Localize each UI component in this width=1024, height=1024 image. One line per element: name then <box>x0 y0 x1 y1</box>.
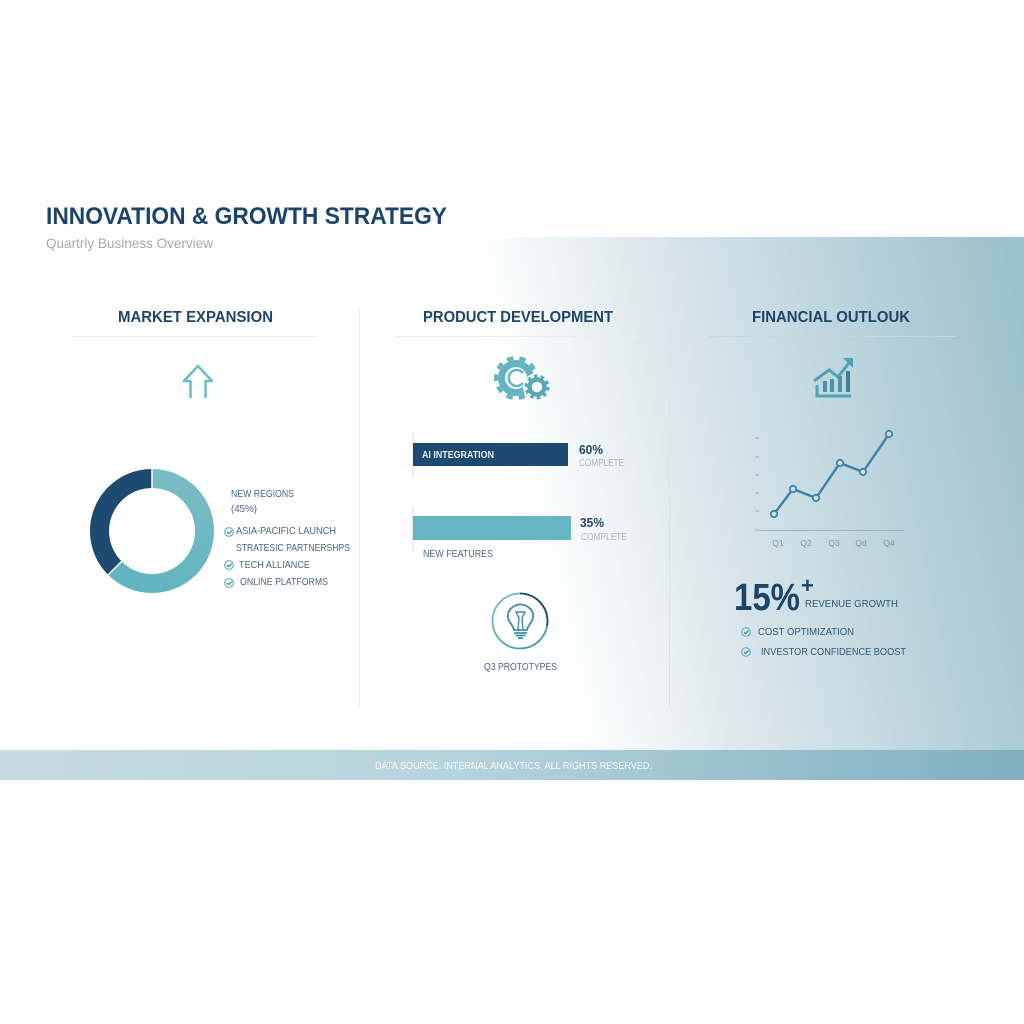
gradient content band <box>0 237 1024 750</box>
value: 60% complete: COMPLETE <box>579 457 624 469</box>
icon: up arrow <box>184 366 212 398</box>
line chart: Qd <box>855 538 867 548</box>
value: 60% complete <box>579 443 624 469</box>
donut legend: ONLINE PLATFORMS <box>240 576 328 588</box>
value: 35% complete <box>580 516 627 543</box>
bar: new features: NEW FEATURES <box>423 548 493 560</box>
donut legend: TECH ALLIANCE <box>239 559 310 571</box>
heading: product development: PRODUCT DEVELOPMENT <box>423 309 613 326</box>
panel: product development <box>394 309 640 673</box>
title: INNOVATION & GROWTH STRATEGY <box>46 203 447 230</box>
line chart: Q1 <box>772 538 784 548</box>
label: Q3 prototypes: Q3 PROTOTYPES <box>484 661 557 673</box>
footer text: DATA SOURCE. INTERNAL ANALYTICS. ALL RIGHTS RESERVED. <box>375 760 652 772</box>
heading: market expansion: MARKET EXPANSION <box>118 309 273 326</box>
line chart: Q2 <box>800 538 812 548</box>
value: 60% complete: 60% <box>579 443 603 457</box>
donut chart <box>100 468 204 584</box>
label: revenue growth: REVENUE GROWTH <box>805 598 898 610</box>
donut legend: NEW REGIONS <box>231 488 294 500</box>
icon: check 5 <box>742 648 750 656</box>
icon: check 1 <box>225 528 233 536</box>
bar: AI integration <box>413 433 568 477</box>
icon: lightbulb progress ring <box>492 594 548 648</box>
footer bar <box>0 750 1024 780</box>
line chart <box>755 431 904 548</box>
bar: new features <box>413 507 571 560</box>
icon: check 3 <box>225 579 233 587</box>
stat: 15% plus: 15% <box>734 577 800 619</box>
icon: growth chart <box>814 358 853 396</box>
value: 35% complete: 35% <box>580 516 604 530</box>
bar: AI integration: AI INTEGRATION <box>422 449 494 461</box>
heading: financial outlook: FINANCIAL OUTLOUK <box>752 309 910 326</box>
icon: check 2 <box>225 561 233 569</box>
line chart: Q3 <box>828 538 840 548</box>
panel: financial outlook <box>709 309 955 658</box>
label: cost optimization: COST OPTIMIZATION <box>758 626 854 638</box>
value: 35% complete: COMPLETE <box>581 531 627 543</box>
label: investor confidence boost: INVESTOR CONFIDENCE BOOST <box>761 646 907 658</box>
panel: market expansion <box>72 309 350 588</box>
line chart: Q4 <box>883 538 895 548</box>
donut legend: STRATESIC PARTNERSHPS <box>236 542 350 554</box>
icon: gears <box>496 358 551 401</box>
icon: check 4 <box>742 628 750 636</box>
donut legend: (45%) <box>231 503 257 515</box>
stat: 15% plus: + <box>801 573 814 598</box>
donut legend: ASIA-PACIFIC LAUNCH <box>236 525 336 537</box>
donut legend <box>231 488 350 588</box>
subtitle: Quartrly Business Overview <box>46 235 214 251</box>
